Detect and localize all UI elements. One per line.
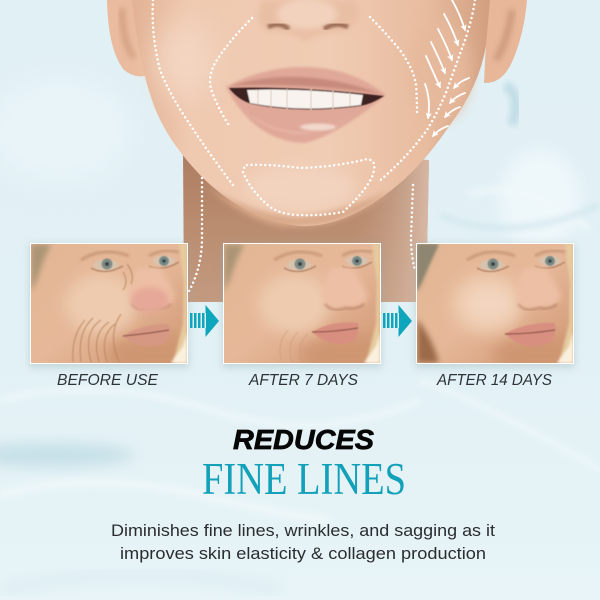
lips	[123, 324, 170, 346]
face shape	[132, 0, 490, 226]
ears	[107, 0, 527, 83]
lifting arrows	[425, 0, 469, 136]
portrait: lower face and neck	[107, 0, 527, 302]
photo: after 14 days	[415, 243, 592, 376]
wrinkles	[73, 264, 132, 362]
lips	[505, 323, 555, 346]
photo: before use	[29, 243, 206, 376]
lips	[312, 322, 358, 344]
neck	[183, 150, 429, 302]
lips and teeth	[226, 67, 386, 143]
description text: Diminishes fine lines, wrinkles, and sagging as it	[111, 521, 495, 540]
arrow: 7 days to 14 days	[383, 305, 412, 337]
description text	[111, 521, 495, 563]
label: after 7 days: AFTER 7 DAYS	[248, 372, 359, 389]
heading: fine lines: FINE LINES	[202, 454, 406, 504]
nose	[258, 0, 359, 42]
arrow: before to 7 days	[190, 305, 219, 337]
fading wrinkles	[280, 330, 308, 362]
photo: after 7 days	[220, 243, 384, 370]
label: after 14 days: AFTER 14 DAYS	[436, 372, 553, 389]
heading: reduces: REDUCES	[233, 424, 375, 455]
label: before use: BEFORE USE	[57, 372, 159, 389]
description text: improves skin elasticity & collagen production	[120, 544, 486, 563]
dotted massage lines	[153, 0, 475, 293]
